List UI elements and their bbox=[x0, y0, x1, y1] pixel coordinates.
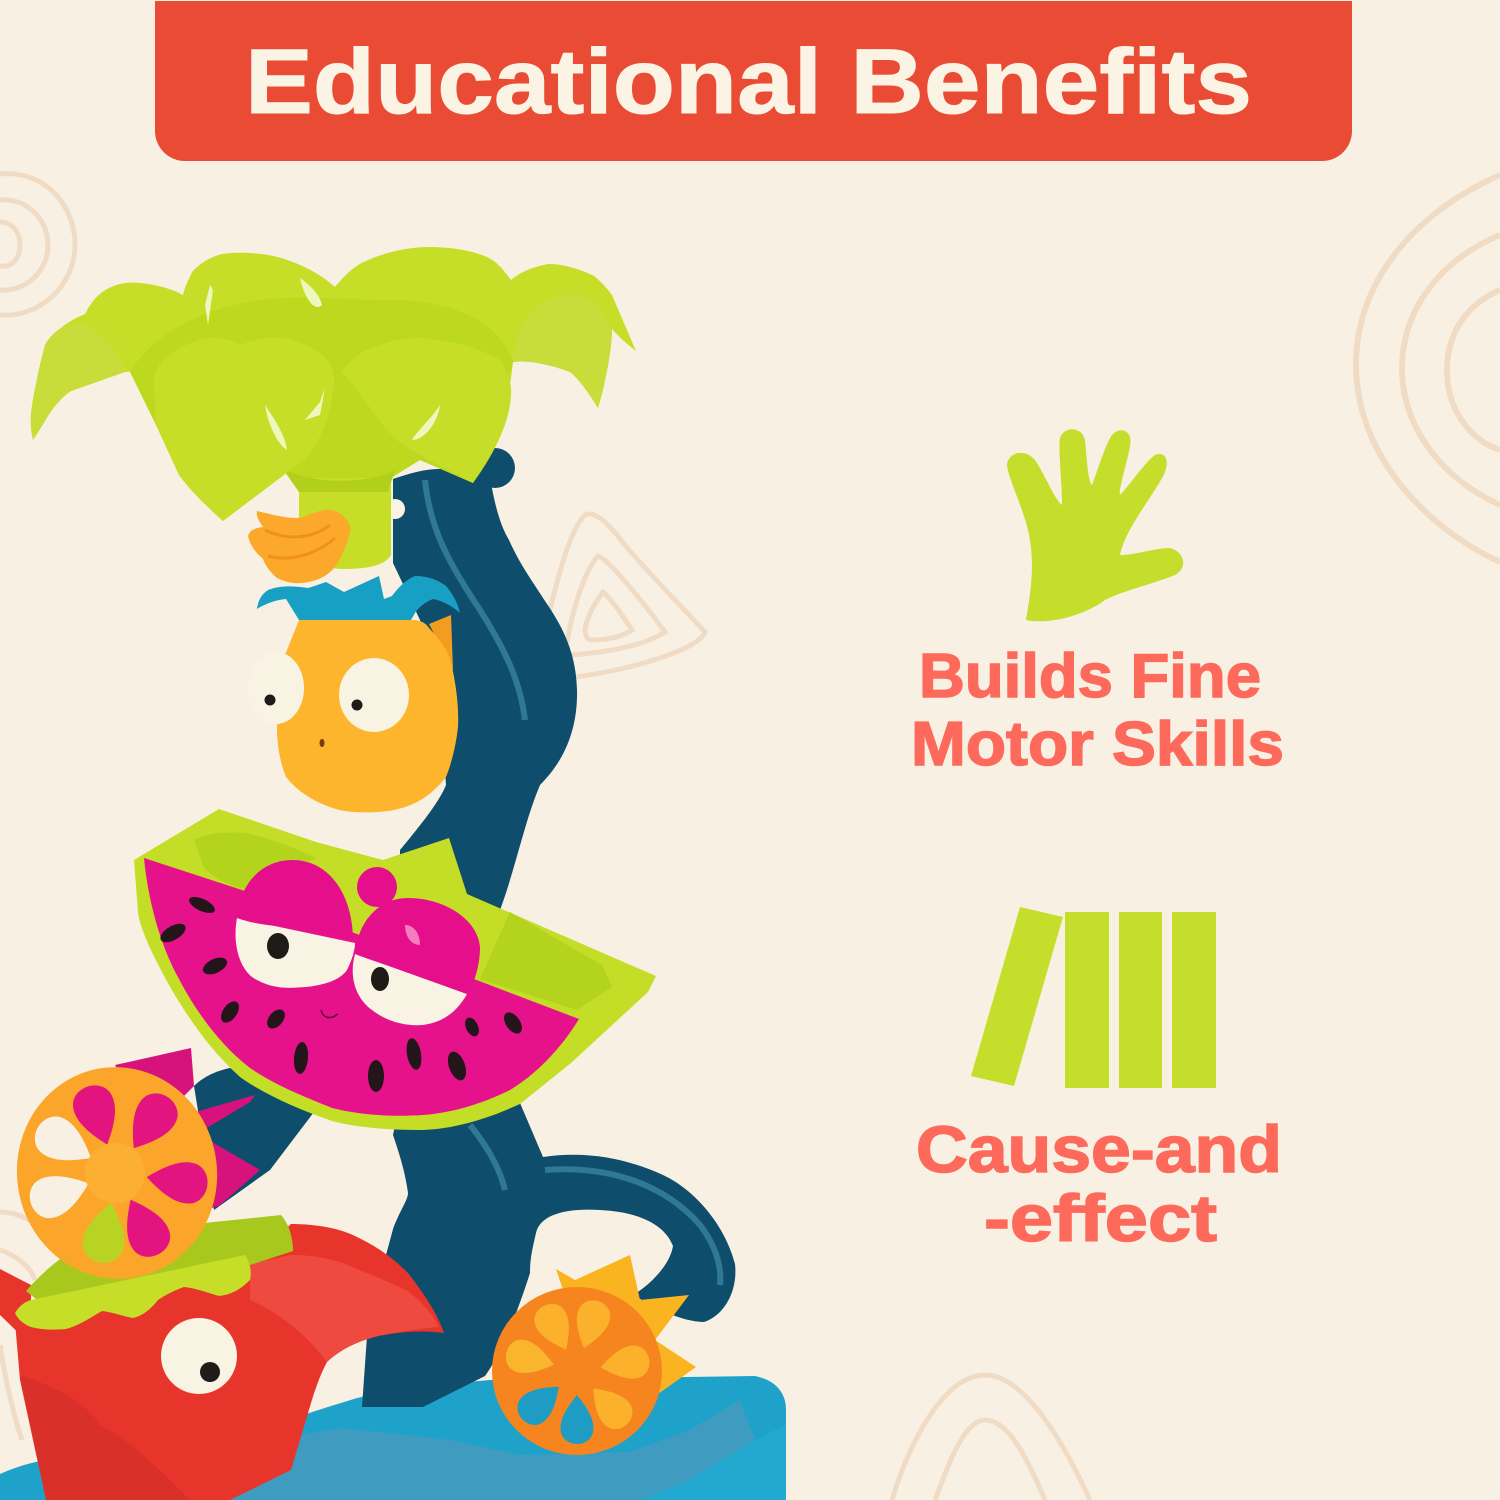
title: Educational Benefits bbox=[245, 31, 1252, 133]
toy trunk bbox=[194, 448, 735, 1407]
watermelon slice bbox=[134, 809, 656, 1130]
pineapple crown bbox=[257, 576, 460, 620]
pineapple eyes bbox=[248, 652, 409, 747]
water table toy illustration bbox=[0, 247, 786, 1500]
icon: books bbox=[971, 907, 1216, 1088]
orange pinwheel bbox=[3, 1054, 231, 1292]
text: builds fine motor skills bbox=[911, 642, 1284, 779]
watermelon eyes bbox=[236, 860, 480, 1025]
text: cause-and-effect bbox=[916, 1112, 1282, 1255]
text: builds fine motor skills: Motor Skills bbox=[911, 710, 1284, 779]
text: cause-and-effect: Cause-and bbox=[916, 1112, 1282, 1186]
text: builds fine motor skills: Builds Fine bbox=[919, 642, 1261, 711]
banana spout bbox=[248, 510, 350, 583]
red bird bbox=[0, 1215, 444, 1500]
pineapple flap bbox=[429, 615, 453, 670]
magenta paddle fins bbox=[51, 1048, 260, 1242]
water basin bbox=[0, 1376, 786, 1500]
palm leaves bbox=[31, 247, 636, 569]
small orange pinwheel bbox=[492, 1255, 696, 1455]
pineapple body bbox=[277, 620, 458, 812]
text: cause-and-effect: -effect bbox=[984, 1181, 1217, 1255]
icon: hand bbox=[1007, 429, 1183, 621]
header banner bbox=[155, 1, 1352, 161]
